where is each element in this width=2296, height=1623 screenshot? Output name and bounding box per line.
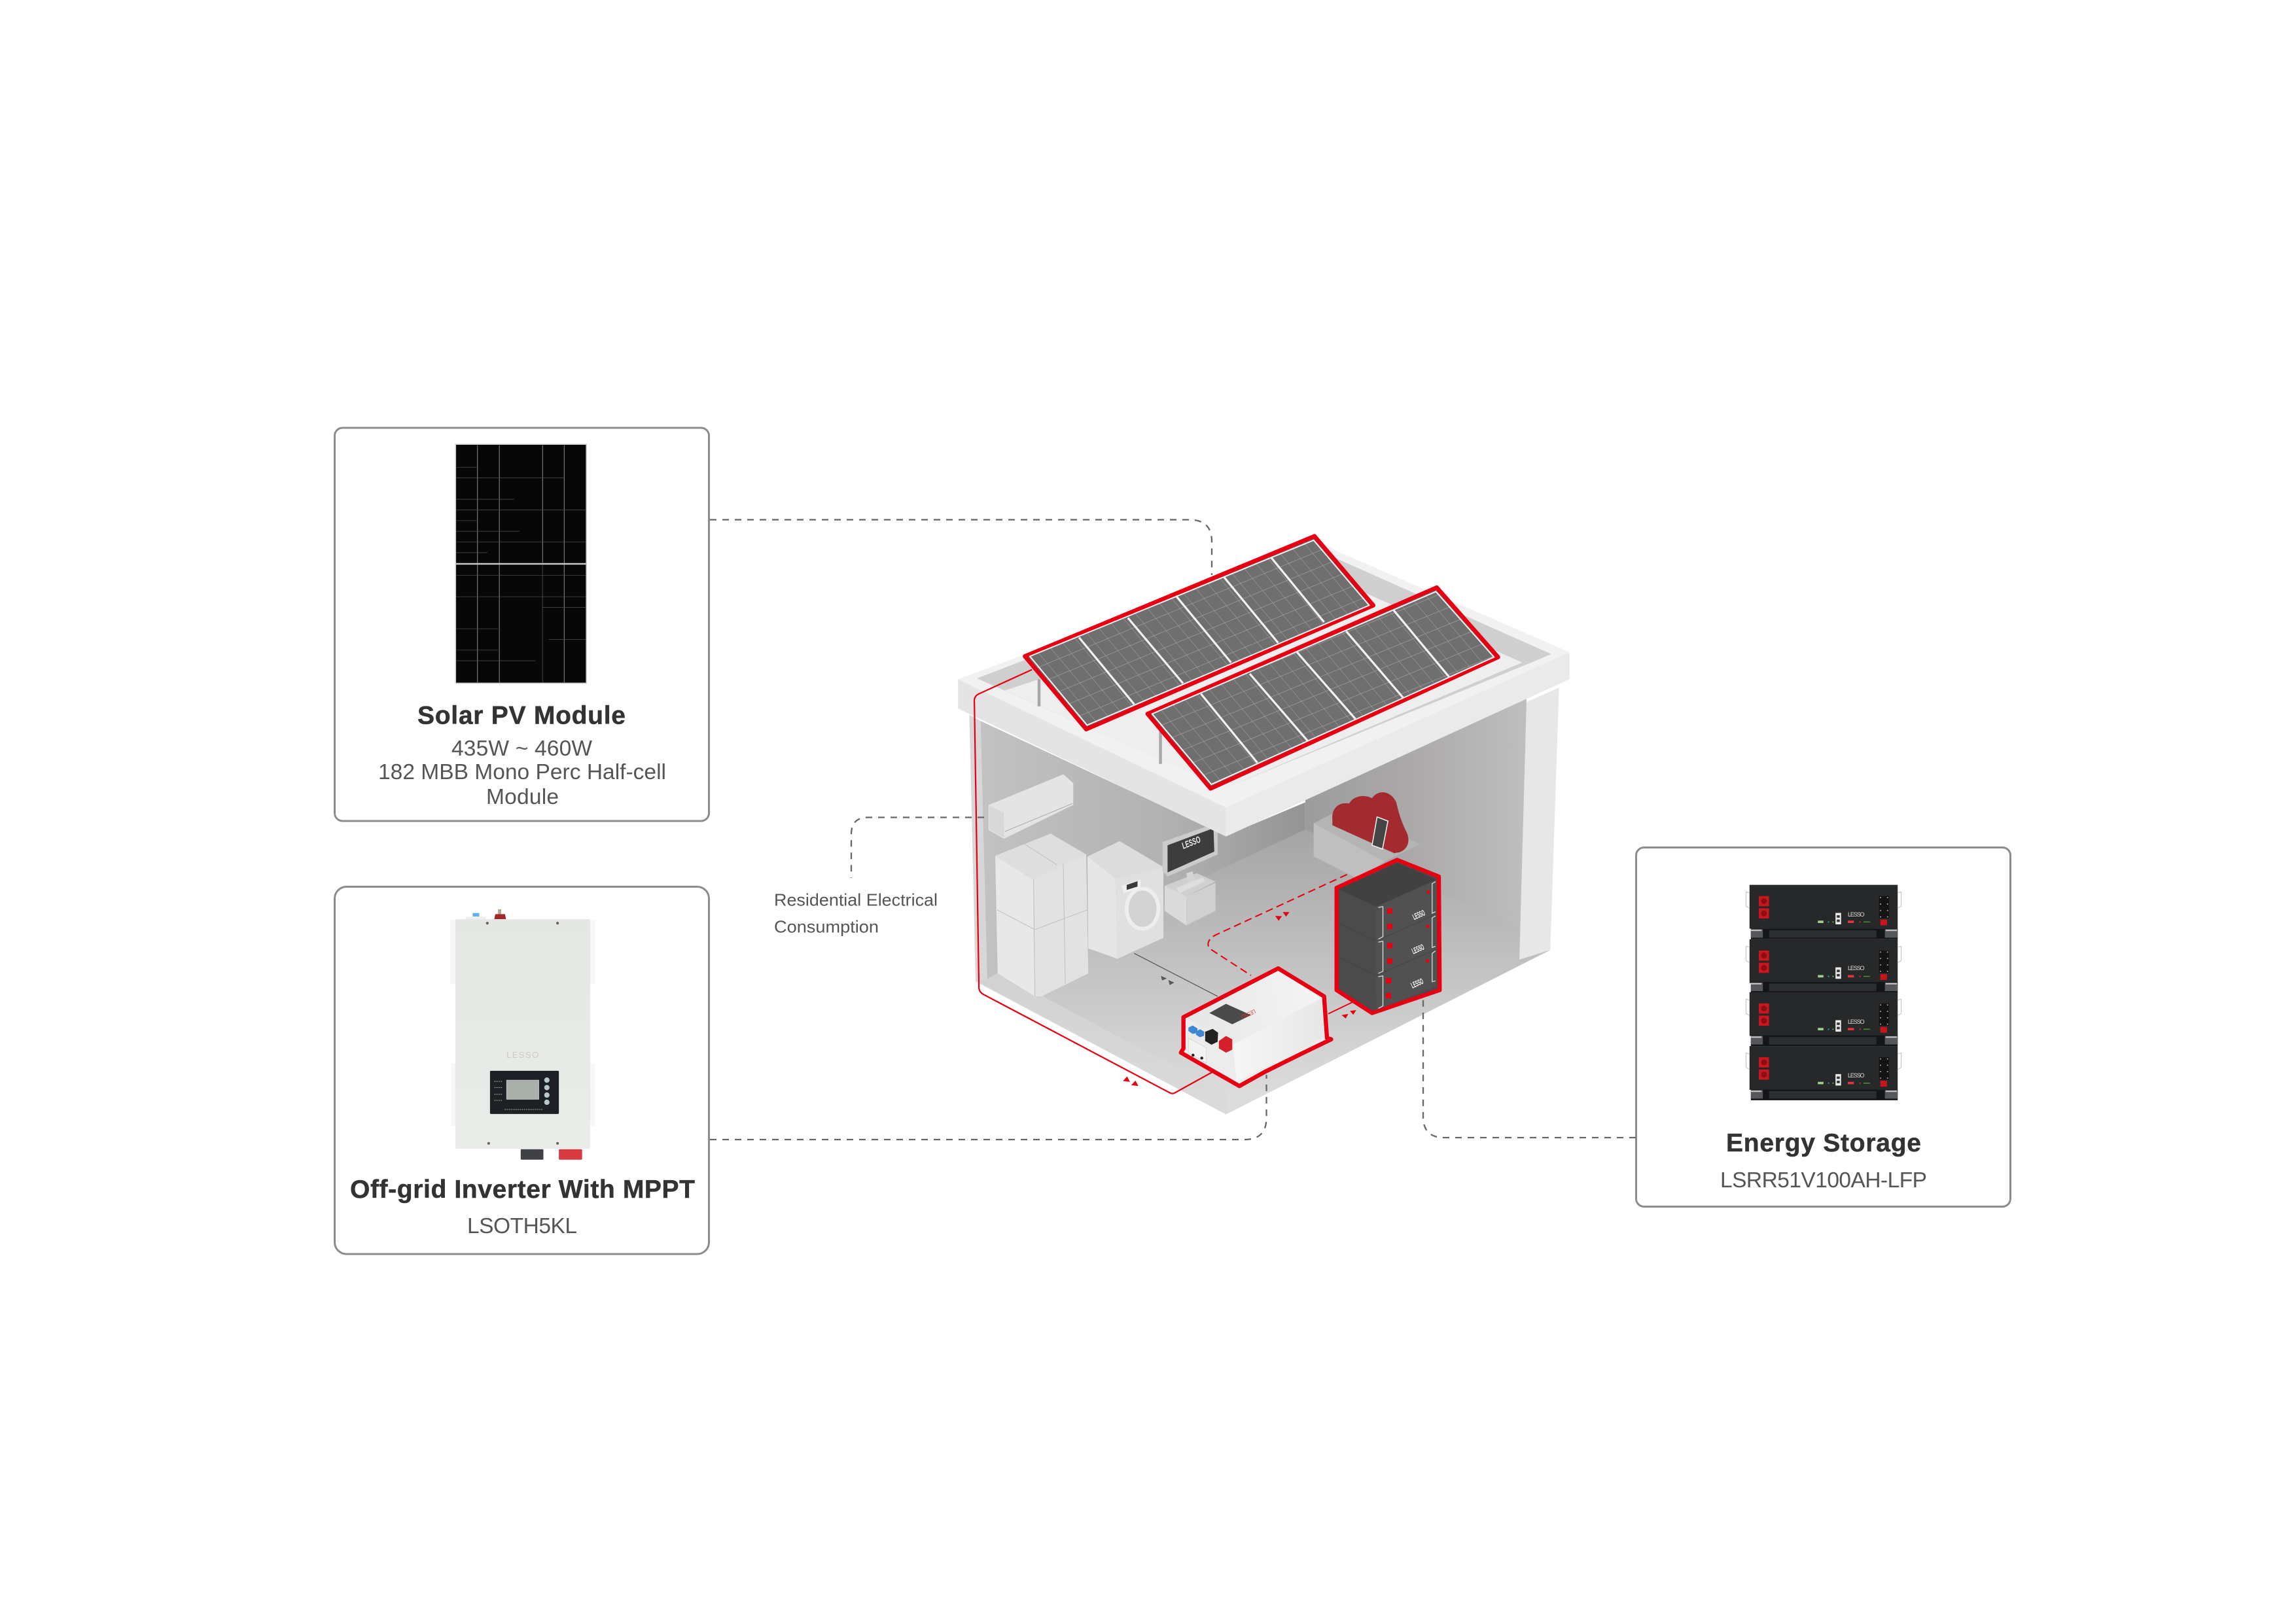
arrows: battery line	[1341, 1010, 1356, 1019]
label: Residential Electrical Consumption: Residential Electrical	[774, 890, 938, 909]
support posts	[1039, 679, 1161, 764]
dashed connector: energy storage	[1423, 998, 1636, 1138]
inverter unit with red outline: LESSO	[1240, 1008, 1256, 1021]
monitor: LESSO	[1180, 834, 1202, 851]
right wall end	[1519, 688, 1559, 960]
arrows: red cable	[1123, 1076, 1139, 1086]
floor slab	[976, 829, 1550, 1115]
inverter product image: LESSO	[506, 1050, 539, 1060]
left wall end	[969, 715, 987, 982]
inverter product image	[450, 909, 595, 1160]
model: LSRR51V100AH-LFP: LSRR51V100AH-LFP	[1720, 1168, 1927, 1193]
arrows: grey	[1161, 976, 1174, 985]
battery stack product image	[1746, 885, 1901, 1100]
skirting	[976, 973, 1226, 1115]
house cutaway illustration	[958, 536, 1570, 1115]
solar array 2	[1148, 587, 1498, 788]
dashed connector: residential consumption	[851, 818, 984, 878]
desk	[1165, 873, 1216, 926]
monitor	[1163, 824, 1218, 894]
label: Residential Electrical Consumption	[774, 890, 938, 937]
roof fascia right	[1226, 652, 1570, 837]
battery stack product image: LESSO	[1848, 965, 1865, 971]
roof inner parapet wall	[977, 544, 1551, 788]
spec text: cell type: 182 MBB Mono Perc Half-cell	[378, 760, 666, 784]
red flow: inverter to loads, dashed	[1208, 875, 1347, 975]
solar module image	[455, 444, 586, 683]
title: Energy Storage: Energy Storage	[1726, 1129, 1921, 1157]
battery stack product image: LESSO	[1848, 1072, 1865, 1079]
roof rim	[958, 537, 1570, 807]
solar array 1	[1025, 536, 1373, 729]
battery stack with red outline: LESSO	[1409, 976, 1425, 990]
arrows: red dashed line	[1275, 912, 1290, 921]
spec text: module: Module	[486, 785, 559, 809]
model: LSOTH5KL: LSOTH5KL	[467, 1214, 577, 1238]
spec text: power range: 435W ~ 460W	[451, 737, 592, 761]
red cable: PV to inverter	[974, 670, 1214, 1094]
battery stack with red outline: LESSO	[1411, 908, 1426, 922]
cloud shelf	[1314, 809, 1420, 879]
title: Solar PV Module: Solar PV Module	[417, 701, 626, 730]
dashed connector: solar module	[710, 519, 1212, 575]
battery stack with red outline: LESSO	[1410, 942, 1426, 956]
line: inverter to battery	[1328, 1002, 1353, 1014]
dashed connector: inverter	[710, 1075, 1267, 1140]
battery stack with red outline	[1337, 860, 1439, 1013]
panel: Solar PV Module	[335, 428, 709, 821]
roof deck	[1005, 581, 1523, 788]
title: Off-grid Inverter With MPPT: Off-grid Inverter With MPPT	[350, 1176, 695, 1204]
panel: Off-grid Inverter With MPPT	[335, 887, 709, 1254]
panel: Energy Storage	[1636, 848, 2010, 1206]
inverter unit with red outline	[1181, 968, 1331, 1086]
battery stack product image: LESSO	[1848, 911, 1865, 918]
air conditioner	[989, 775, 1072, 838]
battery stack product image: LESSO	[1848, 1019, 1865, 1025]
cloud icon with phone	[1332, 792, 1409, 853]
label: Residential Electrical Consumption: Consumption	[774, 917, 879, 937]
back-right wall	[1305, 694, 1527, 961]
back-left wall	[981, 721, 1305, 981]
roof fascia left	[958, 679, 1226, 837]
grey line: inverter to appliances	[1134, 953, 1218, 996]
washing machine	[1087, 841, 1163, 959]
refrigerator	[995, 833, 1088, 996]
